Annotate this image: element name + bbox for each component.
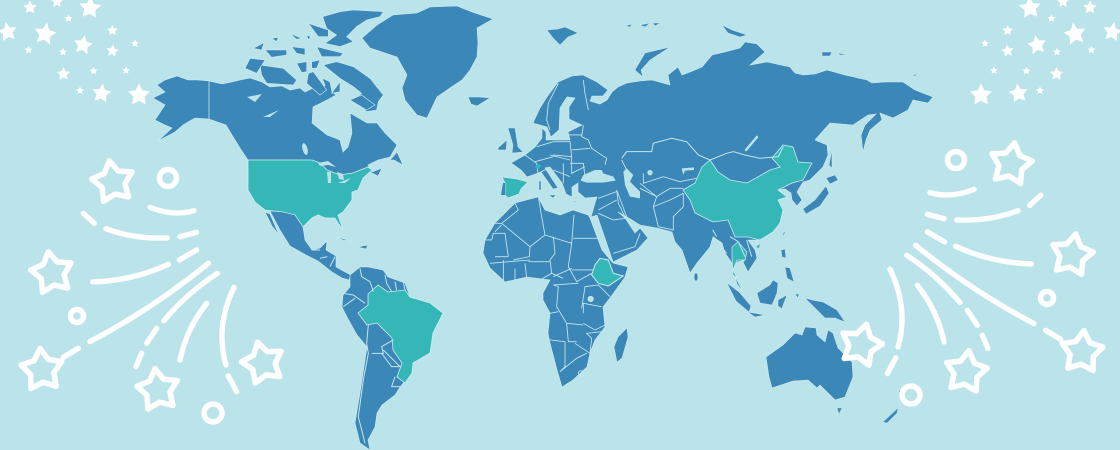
right firework outlines: [837, 139, 1104, 404]
tasmania and new zealand: [837, 390, 902, 423]
united states highlighted: [248, 160, 372, 230]
left small filled stars: [0, 0, 150, 104]
asia borders: [622, 138, 783, 160]
hainan: [756, 244, 760, 248]
arctic archipelago: [245, 10, 383, 112]
southeast asia islands: [694, 231, 799, 317]
brazil highlighted: [358, 285, 443, 383]
portugal: [501, 183, 505, 195]
spain highlighted: [502, 177, 528, 198]
madagascar: [614, 328, 628, 362]
left firework outlines: [20, 157, 287, 422]
black sea, caspian and lakes: [581, 167, 694, 198]
south america borders: [312, 250, 405, 443]
great lakes: [318, 161, 351, 183]
switzerland highlighted: [535, 164, 542, 169]
thailand highlighted: [732, 242, 747, 278]
canadian lakes and border: [209, 81, 309, 155]
right small filled stars: [970, 0, 1120, 104]
greenland and iceland: [362, 6, 493, 118]
britain, ireland, med islands: [498, 128, 578, 202]
ethiopia highlighted: [592, 258, 623, 286]
australia: [766, 327, 853, 400]
papua new guinea: [805, 298, 845, 322]
lake baikal: [746, 137, 757, 150]
south america: [342, 267, 443, 450]
africa borders: [485, 197, 610, 376]
mexico and central america: [265, 211, 368, 280]
north america: canada and alaska: [153, 10, 403, 176]
eurasia: [511, 42, 933, 292]
africa: [483, 197, 628, 387]
arctic eurasian islands and japan: [547, 23, 918, 214]
china highlighted: [683, 145, 812, 240]
world map: [153, 6, 933, 450]
